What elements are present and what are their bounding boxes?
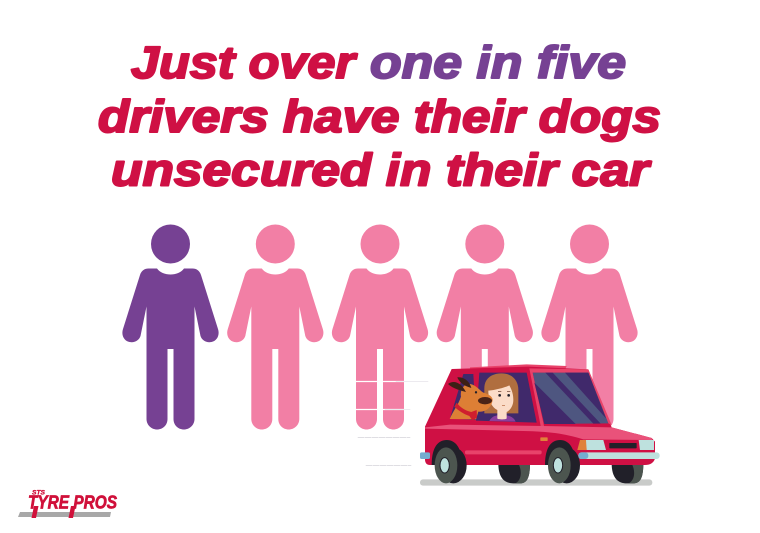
front bumper [578, 452, 660, 459]
top [489, 415, 516, 422]
windshield [533, 373, 608, 424]
woman driver [484, 373, 518, 422]
title line 3: unsecured in their car [111, 144, 652, 196]
dog ear rear [448, 382, 466, 392]
logo wordmark: TYRE PROS [28, 492, 118, 512]
roof highlight [470, 364, 567, 370]
headlight [586, 440, 606, 450]
mouth [502, 405, 505, 407]
logo gray bar [18, 512, 111, 517]
headlight orange [577, 440, 587, 450]
car illustration [420, 364, 660, 486]
side window [476, 373, 537, 423]
ground shadow [420, 479, 652, 486]
near wheel: front [545, 440, 580, 483]
person icons row [122, 224, 638, 430]
title line 1 start: Just over [131, 37, 358, 88]
person: pink 4 [437, 224, 533, 430]
logo STS: STS [32, 490, 46, 496]
hair [484, 373, 518, 413]
dog ear top [457, 377, 471, 388]
eyebrows [498, 390, 510, 393]
motion lines [355, 382, 428, 466]
eyes [498, 394, 501, 397]
dog head and body [450, 384, 493, 419]
rear bumper [420, 452, 430, 459]
person: pink 3 [332, 224, 428, 430]
right lamp [639, 440, 654, 450]
title line 2: drivers have their dogs [98, 91, 661, 142]
rear side window [450, 374, 476, 420]
face and neck [488, 385, 513, 419]
dog eye [475, 391, 477, 393]
collar [454, 403, 477, 421]
far wheels [498, 463, 643, 483]
hood and beltline highlight [425, 425, 652, 440]
grille [609, 443, 637, 448]
near wheel: rear [432, 440, 467, 483]
door handle [540, 437, 548, 441]
dog [448, 377, 493, 421]
car body [425, 367, 655, 465]
dog nose [478, 397, 492, 404]
roof pillar highlight [529, 368, 612, 426]
logo: STS Tyre Pros [18, 490, 118, 518]
title [98, 37, 661, 196]
logo T and P stems [32, 506, 76, 518]
door sill stripe [465, 450, 542, 454]
windshield reflections [534, 383, 576, 424]
person: purple highlighted [122, 224, 219, 430]
title line 1 highlight: one in five [370, 37, 626, 88]
person: pink 5 [541, 224, 638, 430]
person: pink 2 [227, 224, 323, 430]
